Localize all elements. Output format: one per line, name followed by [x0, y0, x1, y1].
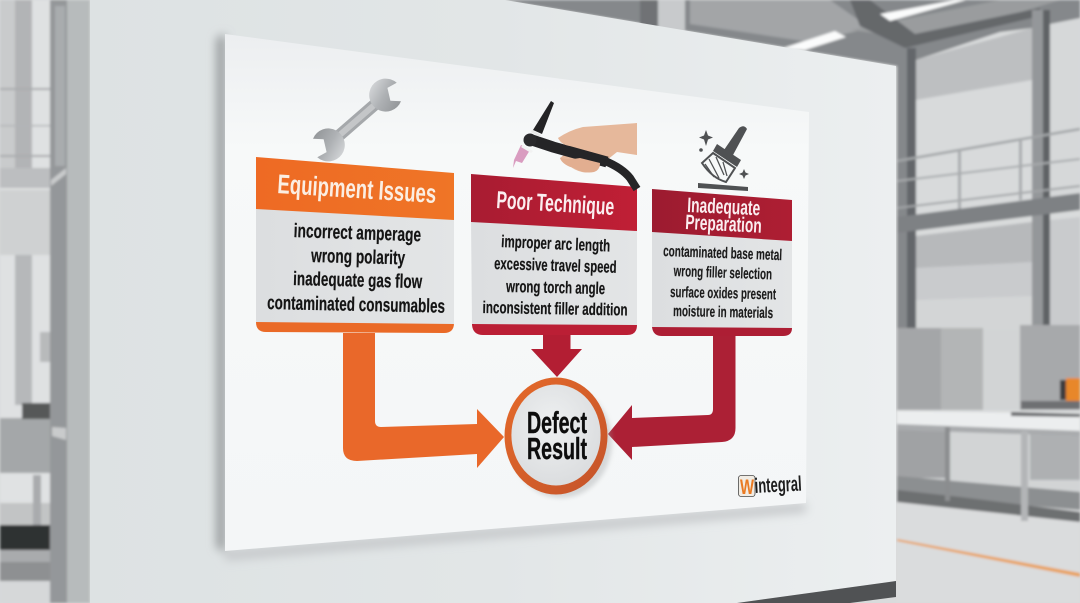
railing [897, 129, 1080, 161]
orange floor line [897, 539, 1080, 577]
list: technique causes: improper arc length [501, 232, 611, 256]
heading: Inadequate Preparation [685, 194, 762, 238]
list: technique causes: excessive travel speed [494, 254, 617, 277]
list: preparation causes: surface oxides present [670, 284, 776, 303]
floor [897, 480, 1080, 603]
card: Poor Technique [471, 174, 637, 335]
label: Defect Result: Result [527, 431, 587, 466]
list: preparation causes: contaminated base metal [663, 243, 782, 264]
arrow: preparation to defect [608, 335, 736, 460]
logo: Wintegral: integral [754, 473, 802, 498]
right columns [897, 48, 916, 328]
ground bar [698, 183, 748, 191]
defect result circle [504, 378, 612, 498]
broom handle [724, 126, 747, 155]
sparkle large [699, 130, 713, 146]
list: technique causes [482, 232, 628, 320]
list: equipment causes: inadequate gas flow [293, 268, 423, 293]
left steel frame [50, 0, 67, 603]
gripping fingers [558, 136, 592, 152]
torch cable [605, 161, 637, 189]
sparkle small [739, 169, 749, 179]
torch handle [532, 140, 607, 162]
arrow: technique to defect [531, 334, 582, 377]
arrow: equipment to defect [343, 333, 504, 468]
ceramic nozzle [513, 145, 530, 168]
hand [558, 123, 637, 172]
ceiling lights [880, 0, 966, 21]
logo: Wintegral [738, 473, 802, 499]
card: Equipment Issues [256, 157, 454, 333]
dots [699, 148, 703, 152]
list: equipment causes [267, 220, 445, 318]
heading: Equipment Issues: Equipment Issues [277, 169, 437, 209]
wall [90, 0, 896, 603]
left background [0, 0, 50, 603]
poster panel [225, 34, 809, 551]
icon: wrench [299, 65, 415, 175]
list: preparation causes: wrong filler selection [673, 263, 772, 283]
heading: Inadequate Preparation: Inadequate [687, 194, 761, 220]
list: equipment causes: wrong polarity [310, 245, 406, 269]
broom bristles [702, 153, 735, 182]
list: preparation causes: moisture in materials [673, 303, 773, 322]
table [897, 411, 1080, 433]
label: Defect Result: Defect [527, 405, 587, 440]
broom ferrule [713, 144, 741, 167]
list: technique causes: inconsistent filler addition [482, 298, 628, 320]
fingers [560, 158, 600, 172]
baseboard [737, 581, 896, 603]
label: Defect Result [527, 405, 587, 466]
booths [897, 328, 941, 410]
ceiling behind wall [500, 0, 1080, 66]
torch back cap [533, 101, 554, 134]
panel shadow [217, 34, 806, 560]
card: Inadequate Preparation [652, 189, 792, 336]
heading: Inadequate Preparation: Preparation [685, 211, 762, 238]
list: preparation causes [663, 243, 782, 322]
list: equipment causes: contaminated consumables [267, 292, 445, 318]
list: equipment causes: incorrect amperage [293, 220, 422, 246]
lower wall [916, 222, 1032, 330]
list: technique causes: wrong torch angle [505, 277, 605, 298]
icon: welding torch in hand [513, 101, 637, 189]
torch head [524, 134, 536, 146]
heading: Poor Technique: Poor Technique [496, 187, 615, 221]
logo: Wintegral: W [740, 476, 754, 499]
mezzanine beam [897, 193, 1080, 233]
right upper wall [916, 28, 1032, 222]
icon: broom cleaning [698, 126, 749, 191]
